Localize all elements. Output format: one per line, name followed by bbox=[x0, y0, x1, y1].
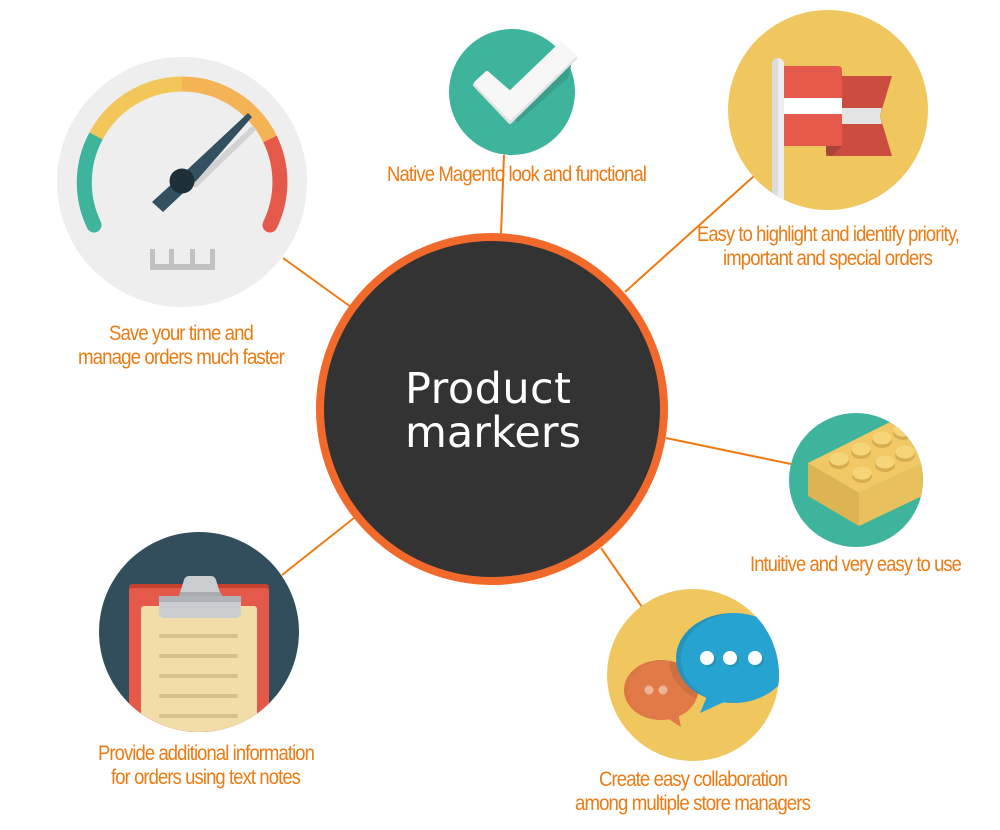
connector lines bbox=[282, 155, 791, 607]
panel: speed gauge bbox=[57, 57, 307, 369]
text: collaboration: among multiple store managers bbox=[575, 792, 810, 815]
heading: Product bbox=[405, 364, 571, 414]
panel: highlight priority bbox=[697, 10, 959, 270]
panel: easy to use bbox=[750, 412, 961, 576]
text: easy to use: Intuitive and very easy to use bbox=[750, 553, 961, 576]
panel: collaboration bbox=[575, 589, 810, 815]
panel: text notes bbox=[98, 532, 314, 789]
icon: flag bbox=[728, 10, 928, 218]
icon: chat bubbles bbox=[607, 589, 795, 761]
panel: native look bbox=[387, 29, 646, 186]
icon: brick bbox=[789, 413, 923, 547]
text: notes: Provide additional information bbox=[98, 742, 314, 765]
text: save time: Save your time and bbox=[109, 322, 253, 345]
text: notes: for orders using text notes bbox=[111, 766, 300, 789]
text: highlight: important and special orders bbox=[723, 247, 932, 270]
icon: gauge bbox=[57, 57, 307, 307]
text: highlight: Easy to highlight and identify priority, bbox=[697, 223, 959, 246]
icon: clipboard bbox=[99, 532, 299, 746]
text: save time: manage orders much faster bbox=[78, 346, 285, 369]
text: collaboration: Create easy collaboration bbox=[599, 768, 787, 791]
central circle: Product markers bbox=[320, 237, 664, 581]
heading: markers bbox=[405, 408, 581, 458]
icon: check mark bbox=[449, 29, 575, 155]
text: native look: Native Magento look and functional bbox=[387, 163, 646, 186]
